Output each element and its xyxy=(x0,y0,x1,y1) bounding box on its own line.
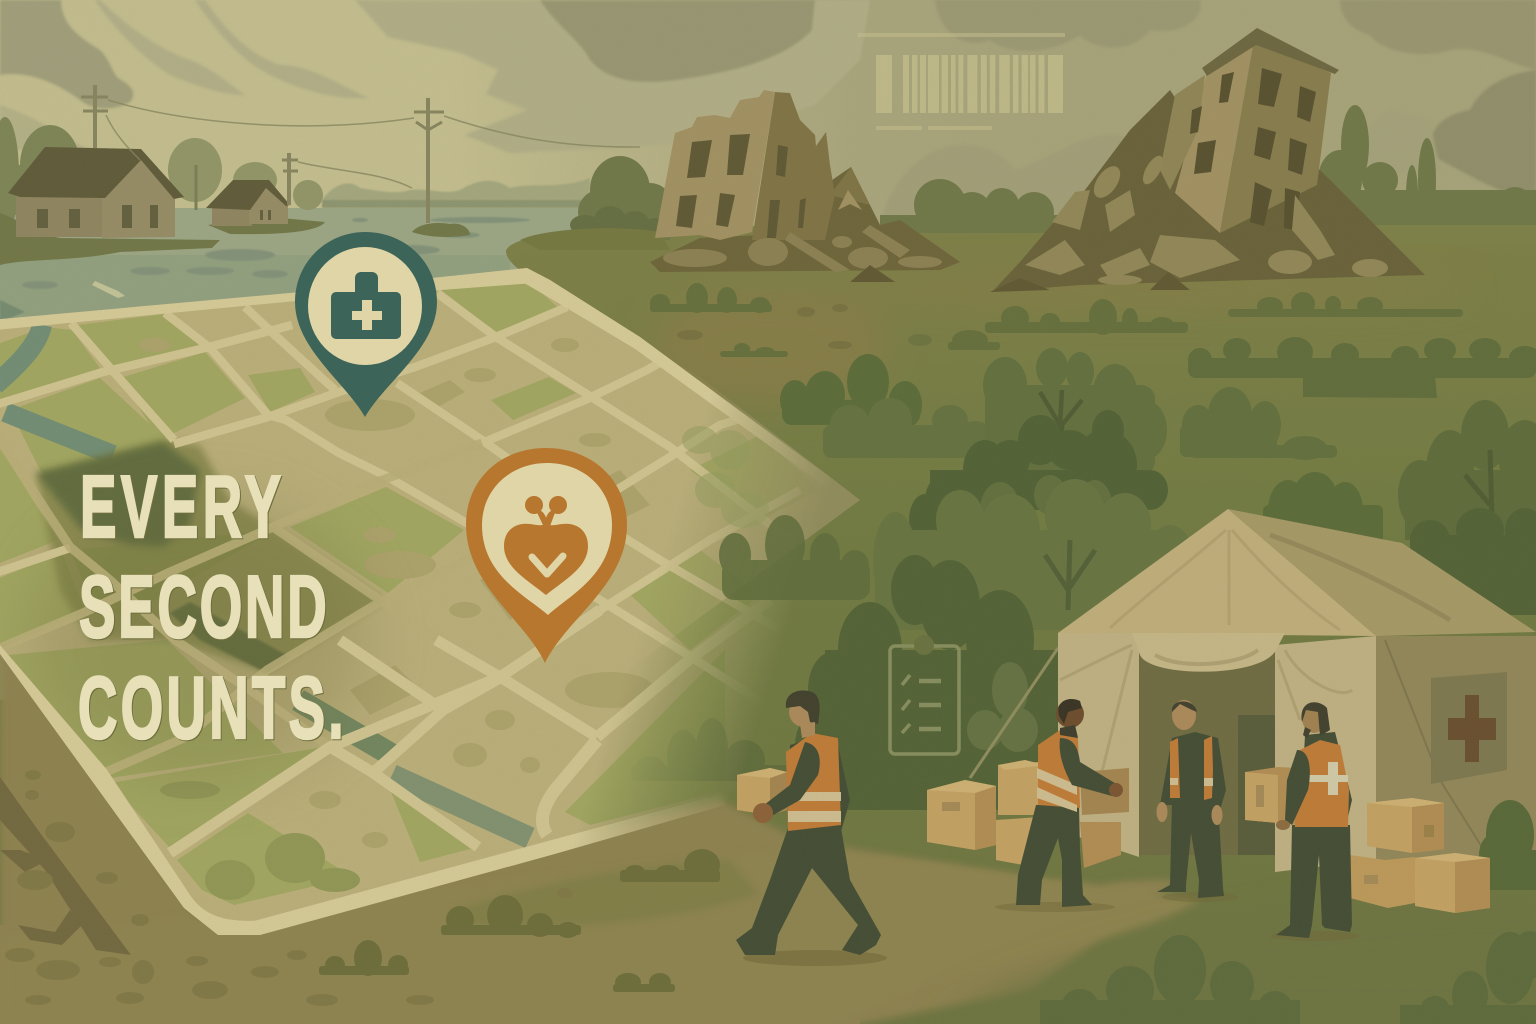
flooded house small xyxy=(206,180,290,226)
ground band and path xyxy=(0,640,1536,1024)
supply boxes xyxy=(737,760,1490,913)
worker three facing xyxy=(1156,700,1238,902)
medical tent xyxy=(970,509,1536,872)
shrub cluster C dark xyxy=(909,410,1168,546)
shrub cluster J behind tent xyxy=(873,479,1192,630)
pin: medical kit xyxy=(295,232,437,417)
icon: medical kit xyxy=(331,272,401,339)
clipboard outline xyxy=(890,635,959,754)
map rivers xyxy=(0,325,530,838)
utility poles and wires xyxy=(81,85,640,223)
box carried by worker four xyxy=(1245,767,1298,825)
trees and bank behind houses xyxy=(0,117,470,265)
tent side roof xyxy=(1228,509,1536,636)
flooded river xyxy=(0,208,600,330)
heading: every second counts: COUNTS. xyxy=(78,659,347,757)
foreground bushes right xyxy=(1040,931,1536,1024)
map street grid xyxy=(0,293,800,720)
map xyxy=(0,268,818,935)
heading: every second counts: EVERY xyxy=(80,458,286,556)
foreground bushes left xyxy=(319,849,720,992)
map green mounds xyxy=(160,781,360,900)
box carried by worker one xyxy=(737,768,787,815)
map sheet xyxy=(0,268,818,935)
olive brown patches in field xyxy=(650,274,1470,405)
rubble mound right xyxy=(992,90,1425,292)
dark patches behind headline xyxy=(30,440,385,780)
shrub cluster A xyxy=(780,354,922,429)
worker one walking xyxy=(736,691,887,966)
flooded house large xyxy=(8,147,184,238)
worker four with cross vest xyxy=(1270,702,1360,941)
stones in field xyxy=(677,304,852,349)
box carried by worker two xyxy=(1080,768,1129,815)
distant treeline left xyxy=(322,178,590,208)
foreground pebbles left xyxy=(5,770,573,1006)
shrub lower left of workers xyxy=(631,718,791,781)
shrubs dissolving over map edge xyxy=(682,426,870,600)
tent side wall xyxy=(1376,636,1536,872)
worker two carrying box xyxy=(995,699,1123,912)
ruined building left xyxy=(650,90,960,282)
large dark shrub behind clipboard xyxy=(795,555,1065,810)
darker tan blocks xyxy=(139,338,655,848)
shrub cluster D xyxy=(1180,387,1337,460)
shrub beside tent right xyxy=(1479,800,1536,890)
pin: nutrition heart xyxy=(466,448,627,663)
tent valance xyxy=(1132,633,1285,672)
icon: heart with check xyxy=(504,496,588,595)
bottom-left ladder xyxy=(0,777,131,955)
rubble mound left xyxy=(650,167,960,272)
map main roads xyxy=(0,275,845,930)
heading: every second counts xyxy=(78,458,347,757)
barcode motif xyxy=(858,33,1065,130)
red cross panel xyxy=(1431,672,1507,784)
small hedges upper field xyxy=(650,283,1463,357)
heading: every second counts: SECOND xyxy=(79,558,330,656)
tent left and right flaps xyxy=(1058,633,1139,857)
tent front roof xyxy=(1058,509,1376,636)
shrub behind tent right xyxy=(1263,472,1383,555)
shrub right edge xyxy=(1398,400,1536,540)
box stack right xyxy=(1350,798,1490,913)
sky xyxy=(0,0,1536,300)
map green blocks xyxy=(0,280,820,905)
shrub cluster B xyxy=(983,348,1167,475)
storm clouds xyxy=(0,0,1536,230)
hills behind ruins xyxy=(520,105,1536,250)
box stack centre xyxy=(927,760,1121,868)
green field xyxy=(0,226,1536,1024)
hedge band right xyxy=(1188,337,1536,398)
tent opening xyxy=(1139,650,1275,855)
ruined tower right xyxy=(990,28,1425,292)
